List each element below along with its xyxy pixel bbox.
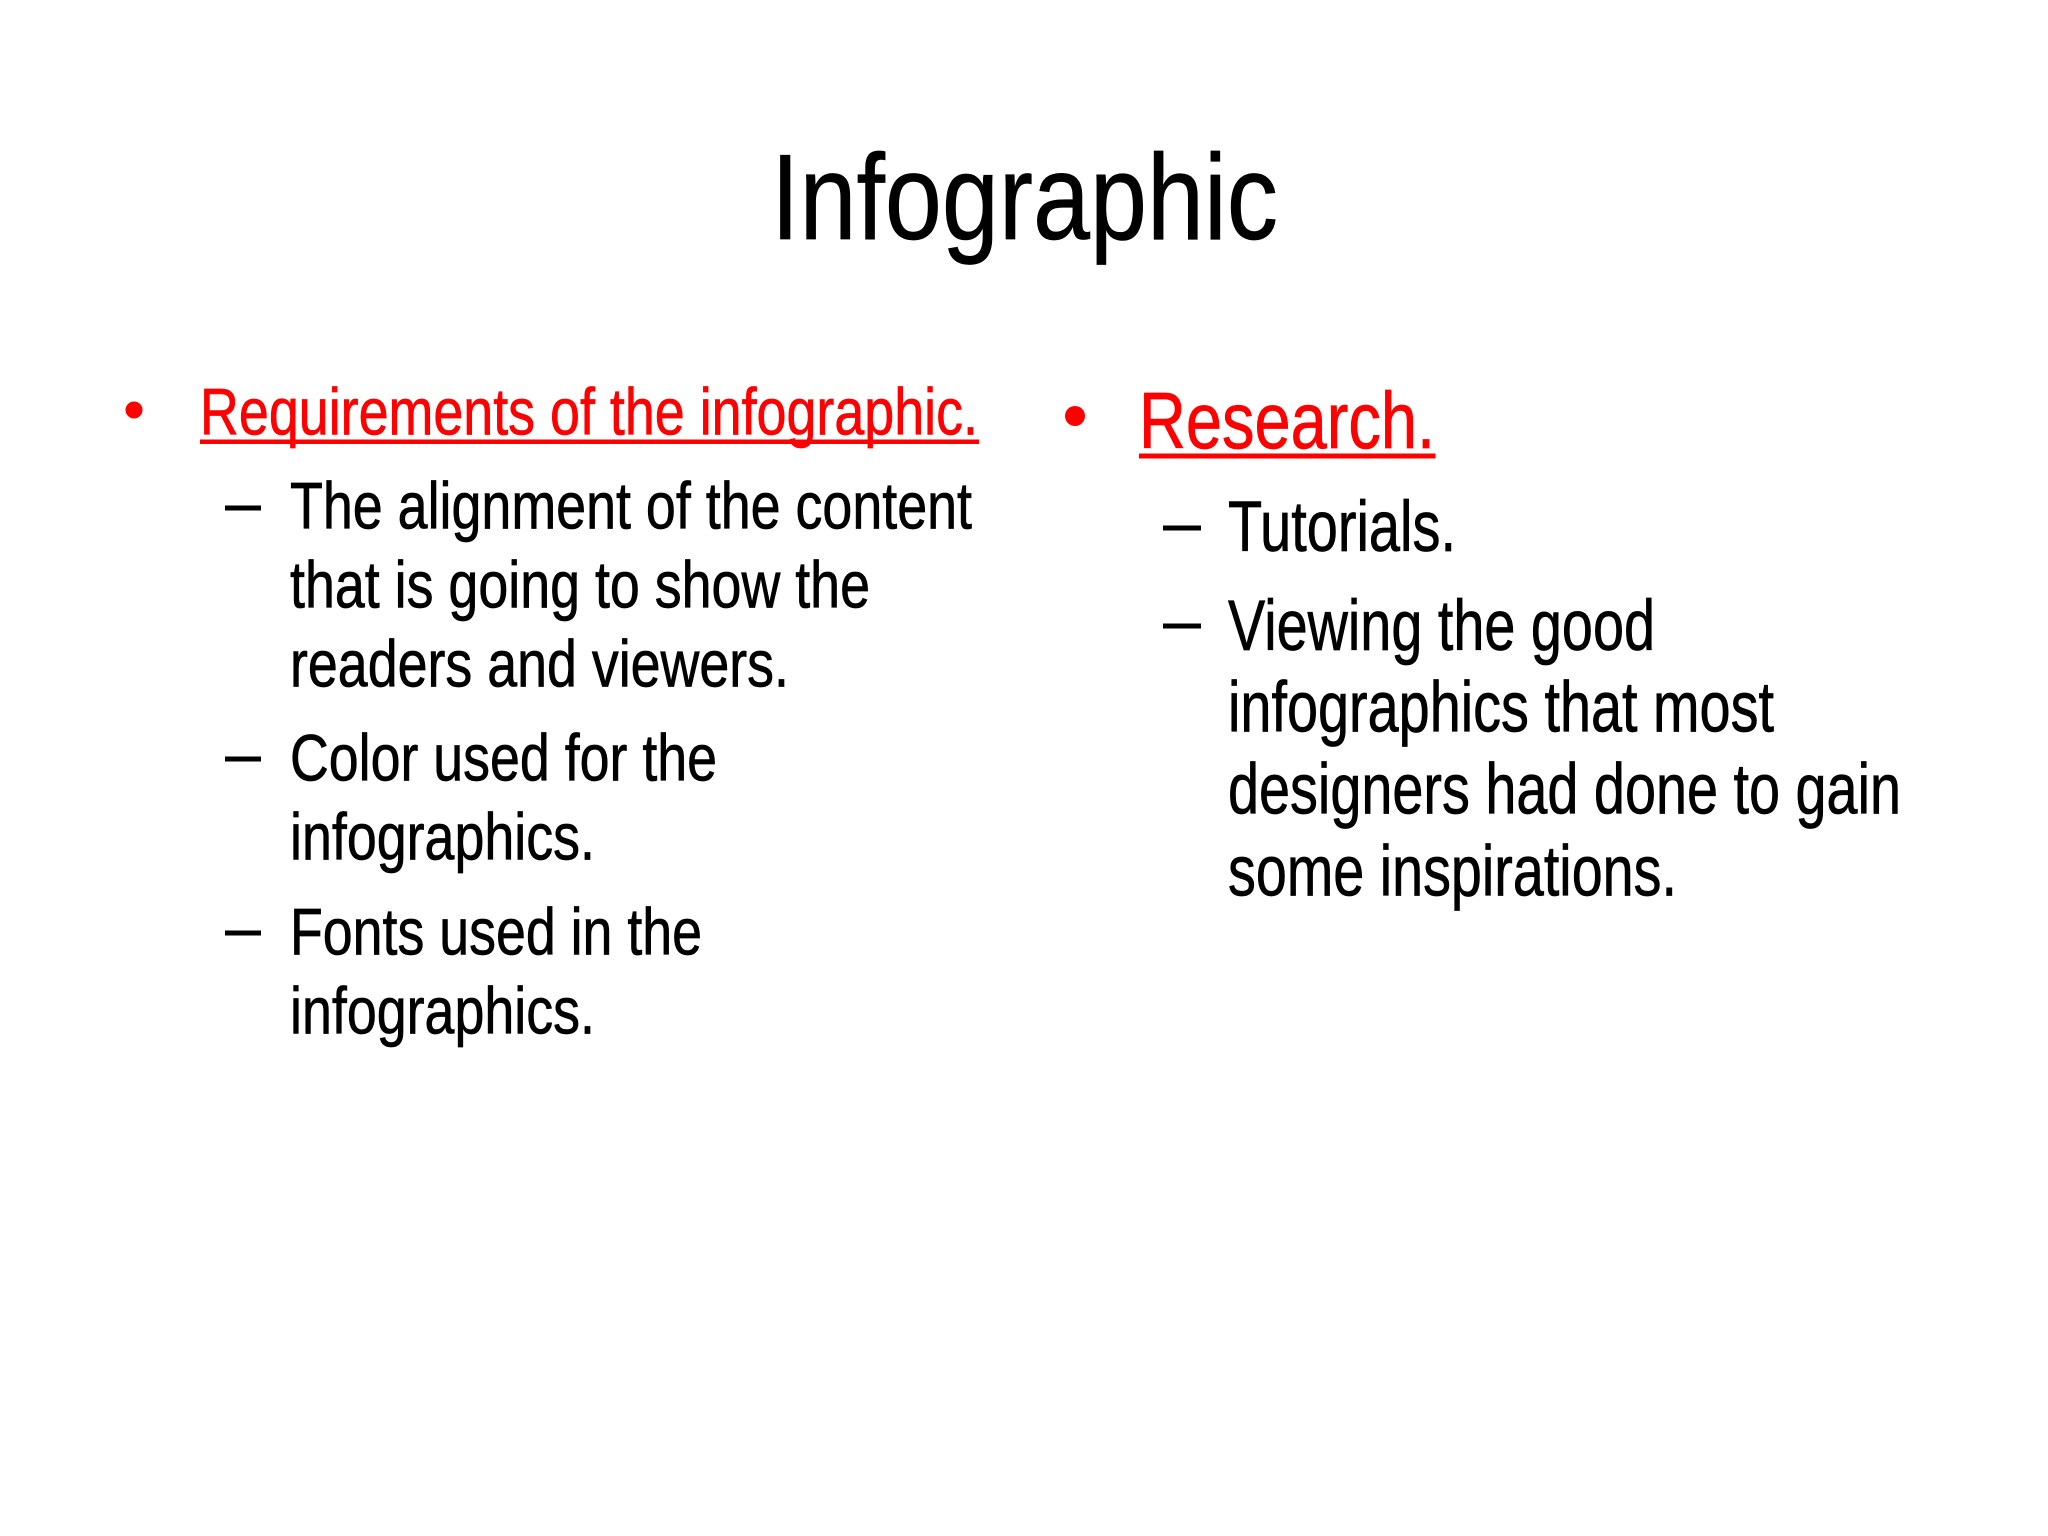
dash: tutorials	[1163, 526, 1201, 530]
dash: alignment	[225, 506, 261, 510]
text block: alignment: that is going to show the	[290, 548, 870, 622]
panel: research	[1065, 376, 1901, 912]
text block: color	[290, 720, 717, 874]
heading: research: Research.	[1139, 376, 1435, 465]
text block: tutorials: Tutorials.	[1228, 488, 1456, 567]
title: Infographic	[771, 129, 1278, 265]
text block: fonts: infographics.	[290, 974, 595, 1048]
panel: requirements	[126, 374, 979, 1048]
text block: viewing	[1228, 587, 1901, 912]
heading: requirements: Requirements of the infographic.	[200, 374, 978, 448]
text block: color: infographics.	[290, 800, 595, 874]
dash: viewing	[1163, 624, 1201, 628]
dash: fonts	[225, 930, 261, 936]
text block: fonts	[290, 894, 702, 1048]
bullet: research	[1065, 406, 1085, 426]
text block: alignment: readers and viewers.	[290, 626, 789, 700]
text block: viewing: Viewing the good	[1228, 587, 1655, 666]
bullet: requirements	[126, 402, 142, 418]
text block: viewing: some inspirations.	[1228, 832, 1677, 912]
text block: alignment: The alignment of the content	[290, 468, 972, 542]
text block: alignment	[290, 468, 972, 700]
text block: fonts: Fonts used in the	[290, 894, 702, 968]
dash: color	[225, 756, 261, 762]
text block: viewing: infographics that most	[1228, 668, 1774, 748]
text block: color: Color used for the	[290, 720, 717, 794]
